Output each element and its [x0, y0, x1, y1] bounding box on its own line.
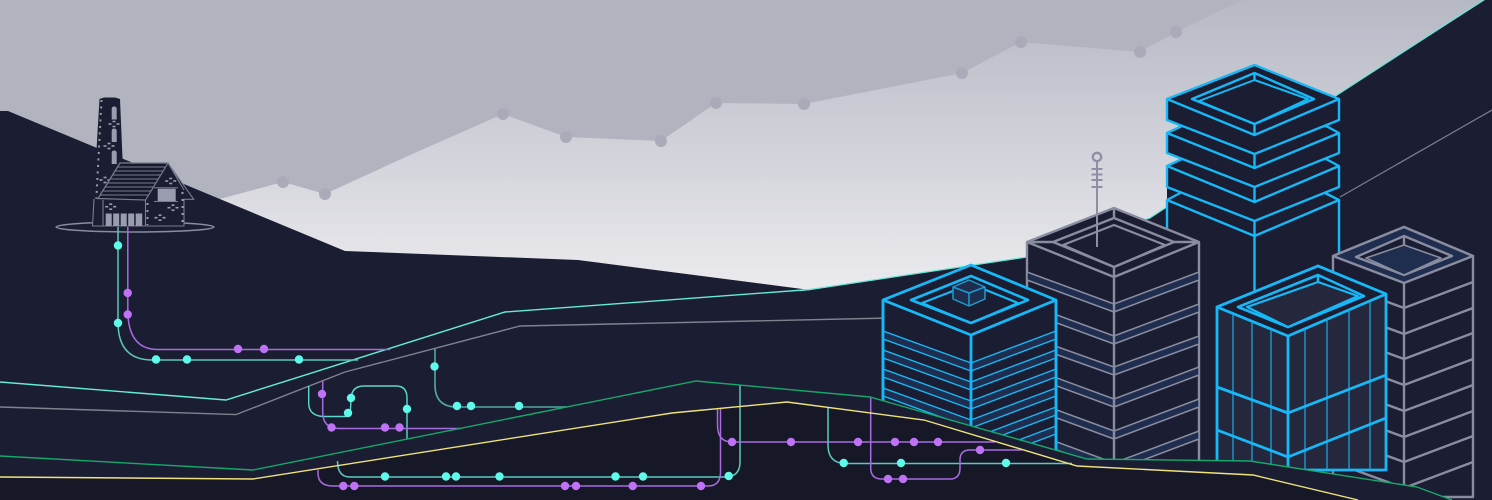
yellow strata line [0, 402, 1358, 500]
purple conduit with nodes [124, 227, 390, 353]
distant mountain with waypoints [0, 0, 1242, 203]
grey strata line [0, 318, 890, 415]
glass panel lines [1233, 301, 1370, 470]
conduit upper centre [430, 349, 567, 410]
purple long conduit [318, 409, 720, 490]
house door slats [106, 214, 142, 226]
house [92, 163, 194, 226]
purple horizontal conduit [718, 409, 995, 446]
cyan loop conduit [309, 386, 411, 439]
building: blue left tower with rooftop cube [883, 265, 1056, 470]
building: grey centre tower with antenna [1027, 153, 1199, 471]
ridge line [800, 0, 1485, 290]
conduits middle loop [309, 381, 461, 439]
conduits from factory [114, 227, 390, 364]
antenna [1092, 153, 1102, 247]
sky background [0, 0, 1492, 295]
conduits right group [718, 397, 1072, 483]
cyan conduit with nodes [114, 227, 358, 364]
conduits bottom long run [318, 385, 740, 490]
cyan strata line [0, 290, 810, 400]
chimney [92, 98, 123, 226]
cyan long conduit [338, 385, 740, 481]
factory ground ellipse [56, 222, 214, 232]
far right grey line [1340, 110, 1492, 197]
green strata line [0, 381, 1452, 500]
house window [158, 189, 176, 201]
building: grey right tower [1333, 227, 1473, 497]
building: tall blue stacked tower [1167, 65, 1339, 300]
cyan horizontal conduit [828, 408, 1072, 467]
rooftop cube [953, 280, 985, 306]
factory [56, 98, 214, 232]
deep ground layer [0, 402, 1358, 500]
purple loop conduit [318, 381, 461, 432]
foreground ground layer [0, 381, 1452, 500]
purple stepped conduit [871, 397, 1022, 483]
building: blue front tower with glass panels [1217, 266, 1386, 470]
